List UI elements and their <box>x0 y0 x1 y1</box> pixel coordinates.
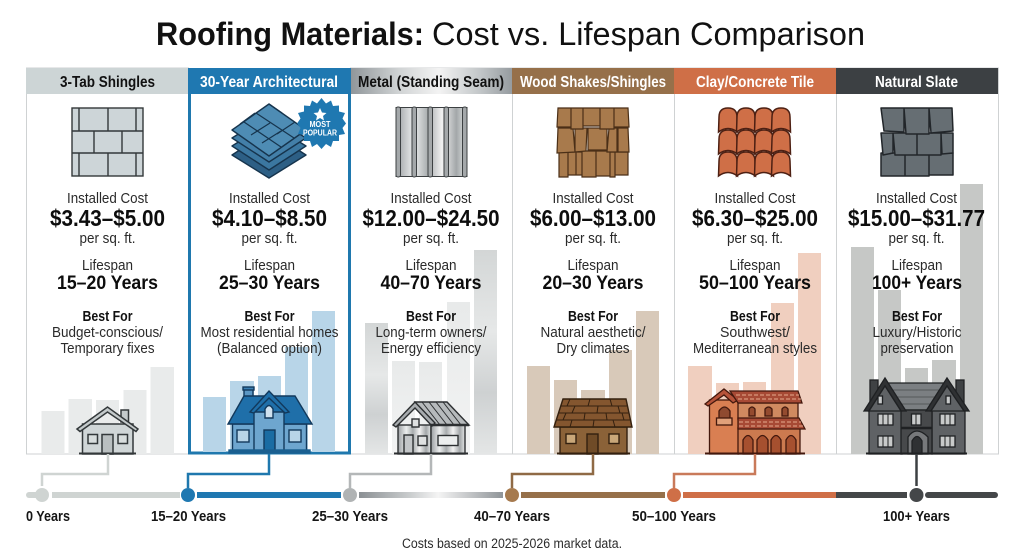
title: Roofing Materials: <box>156 16 424 52</box>
bar chart: 3-Tab background bars <box>42 367 174 454</box>
panel: Metal (Standing Seam) <box>350 68 512 454</box>
icon: wood shakes <box>557 108 629 177</box>
header: Slate: Natural Slate <box>875 74 958 91</box>
timeline <box>26 488 998 525</box>
best for <box>540 308 646 357</box>
footnote: Costs based on 2025-2026 market data. <box>402 536 622 551</box>
panel: 3-Tab Shingles <box>26 68 188 454</box>
badge: most popular: POPULAR <box>303 128 337 138</box>
best for <box>693 308 817 357</box>
lifespan <box>57 257 158 294</box>
timeline labels: 50–100 Years <box>632 509 716 525</box>
panel: Wood Shakes/Shingles <box>512 68 674 454</box>
header: Clay: Clay/Concrete Tile <box>696 74 814 91</box>
installed cost: $6.00–$13.00 <box>530 205 656 231</box>
badge: most popular: MOST <box>310 120 331 129</box>
icon: clay tiles <box>718 108 790 176</box>
timeline labels: 15–20 Years <box>151 509 226 525</box>
best for: Natural aesthetic/ <box>540 324 646 341</box>
icon: wood cabin <box>554 399 632 454</box>
best for: Best For <box>568 308 618 325</box>
best for: Dry climates <box>556 340 630 357</box>
lifespan: 15–20 Years <box>57 273 158 294</box>
installed cost: Installed Cost <box>714 190 796 207</box>
lifespan: Lifespan <box>244 257 295 274</box>
installed cost <box>848 190 985 247</box>
best for: preservation <box>880 340 954 357</box>
best for: Budget-conscious/ <box>52 324 164 341</box>
installed cost <box>212 190 327 247</box>
header: 30-Year Architectural <box>188 68 351 94</box>
header: Clay <box>674 68 836 94</box>
header: Wood: Wood Shakes/Shingles <box>520 74 666 91</box>
best for: Temporary fixes <box>60 340 154 357</box>
installed cost: per sq. ft. <box>888 230 944 247</box>
installed cost <box>692 190 818 247</box>
lifespan: Lifespan <box>568 257 618 274</box>
bar chart: clay background bars <box>688 253 821 454</box>
lifespan <box>380 257 482 294</box>
best for: Mediterranean styles <box>693 340 817 357</box>
best for: Most residential homes <box>200 324 338 341</box>
best for: Best For <box>892 308 942 325</box>
lifespan: 25–30 Years <box>219 273 320 294</box>
icon: 3-tab shingle swatch <box>72 108 143 176</box>
installed cost: per sq. ft. <box>403 230 459 247</box>
panel: Clay/Concrete Tile <box>674 68 836 454</box>
best for <box>200 308 338 357</box>
installed cost: $12.00–$24.50 <box>362 205 500 231</box>
icon: metal roof house <box>393 402 469 454</box>
installed cost: Installed Cost <box>67 190 149 207</box>
lifespan: Lifespan <box>406 257 456 274</box>
best for: Best For <box>406 308 456 325</box>
header: Wood <box>512 68 674 94</box>
installed cost: Installed Cost <box>552 190 634 207</box>
icon: simple gray house <box>77 407 138 454</box>
best for: Long-term owners/ <box>376 324 487 341</box>
badge: most popular <box>297 98 346 149</box>
best for <box>872 308 962 357</box>
best for: Luxury/Historic <box>872 324 962 341</box>
installed cost: per sq. ft. <box>80 230 136 247</box>
best for: Best For <box>82 308 133 325</box>
lifespan: 40–70 Years <box>380 273 482 294</box>
header: Metal <box>350 68 512 94</box>
lifespan <box>872 257 962 294</box>
installed cost: per sq. ft. <box>727 230 783 247</box>
best for: Best For <box>730 308 780 325</box>
lifespan: 100+ Years <box>872 273 962 294</box>
header: Metal: Metal (Standing Seam) <box>358 74 504 91</box>
header: 3-Tab Shingles <box>26 68 188 94</box>
best for: Best For <box>244 308 295 325</box>
installed cost: Installed Cost <box>390 190 472 207</box>
bar chart: slate background bars <box>851 184 983 454</box>
installed cost <box>50 190 165 247</box>
installed cost: per sq. ft. <box>565 230 621 247</box>
best for: (Balanced option) <box>217 340 322 357</box>
lifespan: 50–100 Years <box>699 273 811 294</box>
bar chart: metal background bars <box>365 250 497 454</box>
best for <box>376 308 487 357</box>
installed cost: Installed Cost <box>876 190 958 207</box>
installed cost <box>530 190 656 247</box>
installed cost: per sq. ft. <box>242 230 298 247</box>
icon: blue house <box>228 387 312 453</box>
connectors: house to timeline <box>42 454 916 488</box>
installed cost: $3.43–$5.00 <box>50 205 165 231</box>
lifespan: 20–30 Years <box>542 273 644 294</box>
lifespan: Lifespan <box>892 257 942 274</box>
timeline labels: 100+ Years <box>883 509 950 525</box>
header: Slate <box>836 68 998 94</box>
bar chart: architectural background bars <box>203 311 335 452</box>
installed cost: $6.30–$25.00 <box>692 205 818 231</box>
installed cost: $4.10–$8.50 <box>212 205 327 231</box>
lifespan: Lifespan <box>730 257 780 274</box>
icon: standing seam panel <box>396 107 467 177</box>
best for: Energy efficiency <box>381 340 481 357</box>
timeline segments <box>26 492 998 498</box>
best for: Southwest/ <box>720 324 791 341</box>
best for <box>52 308 164 357</box>
lifespan <box>219 257 320 294</box>
header: 30-Year Architectural: 30-Year Architectural <box>200 74 338 91</box>
timeline labels: 25–30 Years <box>312 509 388 525</box>
timeline labels: 0 Years <box>26 509 70 525</box>
lifespan <box>542 257 644 294</box>
lifespan <box>699 257 811 294</box>
panel: Natural Slate <box>836 68 998 454</box>
icon: architectural shingle stack <box>232 104 306 178</box>
icon: slate manor house <box>864 378 969 454</box>
timeline nodes <box>35 488 924 502</box>
timeline labels <box>26 509 950 525</box>
installed cost <box>362 190 500 247</box>
panel: 30-Year Architectural (highlighted) <box>188 68 351 453</box>
title <box>156 16 865 52</box>
header: 3-Tab Shingles: 3-Tab Shingles <box>60 74 155 91</box>
timeline labels: 40–70 Years <box>474 509 550 525</box>
installed cost: Installed Cost <box>229 190 311 207</box>
title: Cost vs. Lifespan Comparison <box>432 16 865 52</box>
lifespan: Lifespan <box>82 257 133 274</box>
bar chart: wood background bars <box>527 311 659 454</box>
icon: slate tiles <box>881 108 953 176</box>
installed cost: $15.00–$31.77 <box>848 205 985 231</box>
icon: Mediterranean house <box>705 389 805 454</box>
